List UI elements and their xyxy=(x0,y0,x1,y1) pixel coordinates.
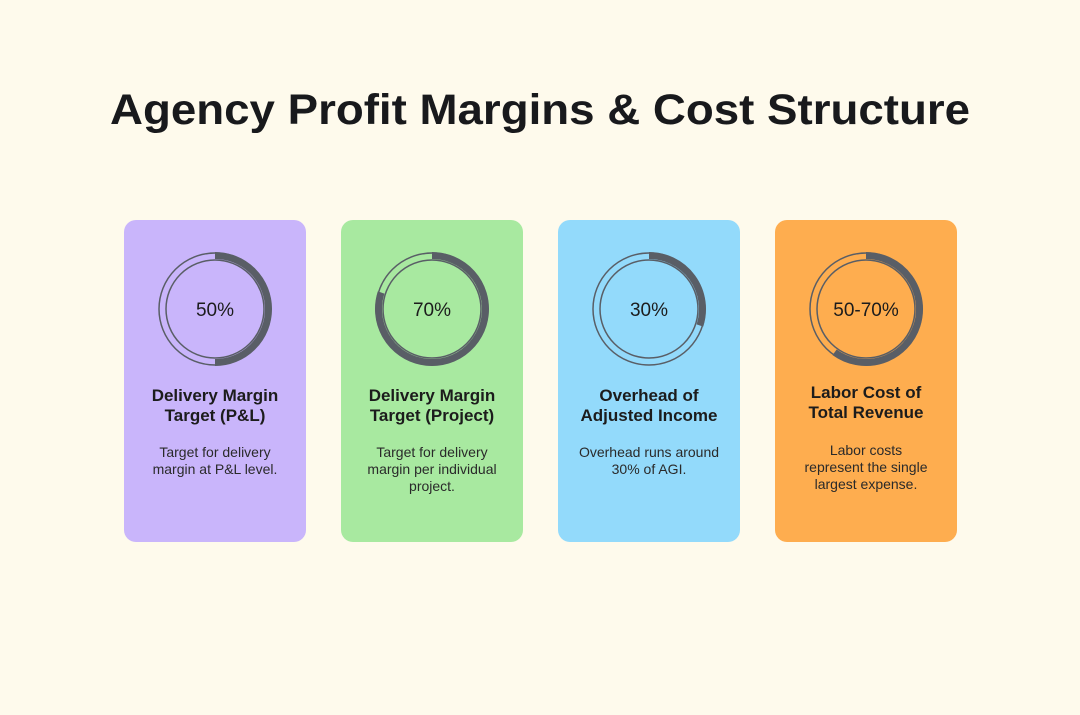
panel: delivery margin project: margin per individual xyxy=(367,461,497,477)
heading: Labor Cost of xyxy=(811,383,922,402)
panel: overhead: Adjusted Income xyxy=(581,406,717,425)
icon: progress ring 50% xyxy=(159,253,271,365)
description: Target for delivery xyxy=(376,444,488,460)
title: Agency Profit Margins & Cost Structure xyxy=(110,86,970,134)
panel: delivery margin project: project. xyxy=(409,478,455,494)
value: 50% xyxy=(196,300,234,321)
heading: Delivery Margin xyxy=(369,386,495,405)
value: 50-70% xyxy=(833,300,899,321)
description: Target for delivery xyxy=(159,444,271,460)
panel: labor cost xyxy=(775,220,957,542)
icon: progress ring 60% xyxy=(810,253,922,365)
panel: overhead: 30% of AGI. xyxy=(612,461,686,477)
icon: progress ring 30% xyxy=(593,253,705,365)
panel: labor cost: represent the single xyxy=(805,459,928,475)
panel: labor cost: Total Revenue xyxy=(809,403,923,422)
description: Overhead runs around xyxy=(579,444,719,460)
panel: delivery margin P&L: margin at P&L level. xyxy=(153,461,277,477)
heading: Delivery Margin xyxy=(152,386,278,405)
value: 30% xyxy=(630,300,668,321)
panel: overhead xyxy=(558,220,740,542)
panel: delivery margin P&L xyxy=(124,220,306,542)
panel: delivery margin project: Target (Project) xyxy=(370,406,494,425)
panel: delivery margin project xyxy=(341,220,523,542)
icon: progress ring 70% xyxy=(376,253,488,365)
value: 70% xyxy=(413,300,451,321)
description: Labor costs xyxy=(830,442,902,458)
heading: Overhead of xyxy=(599,386,699,405)
panel: labor cost: largest expense. xyxy=(815,476,917,492)
panel: delivery margin P&L: Target (P&L) xyxy=(165,406,265,425)
